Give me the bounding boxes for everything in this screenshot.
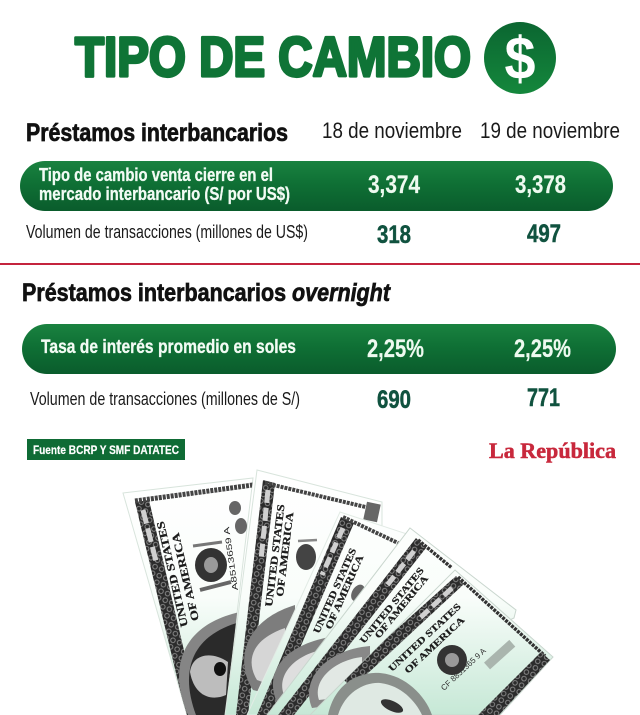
text: volumen dólares: Volumen de transacciones (millones de US$)	[26, 222, 308, 242]
panel: tipo de cambio row: Tipo de cambio venta cierre en el	[39, 164, 273, 185]
source tag: Fuente BCRP Y SMF DATATEC	[33, 445, 179, 457]
bill 3: UNITED STATES	[312, 546, 359, 635]
icon: dollar coin	[484, 22, 556, 94]
value: 690: 690	[377, 386, 411, 414]
value: 497: 497	[527, 220, 561, 248]
panel: tasa de interés row: 2,25%	[514, 335, 571, 363]
bill 3: OF AMERICA	[324, 553, 367, 631]
logo: La República: La República	[489, 438, 616, 463]
bill 5: OF AMERICA	[403, 616, 467, 676]
bill 1: A8513659 A	[222, 525, 240, 591]
panel: tipo de cambio row: 3,378	[515, 171, 566, 199]
panel: tasa de interés row: 2,25%	[367, 335, 424, 363]
heading: préstamos interbancarios: Préstamos interbancarios	[26, 119, 288, 147]
panel: tasa de interés row: Tasa de interés promedio en soles	[41, 337, 296, 358]
bill 4	[267, 528, 516, 715]
panel: tipo de cambio row: 3,374	[368, 171, 420, 199]
bill 4: UNITED STATES	[359, 566, 427, 646]
bill 2: UNITED STATES	[264, 504, 288, 607]
bill 5: UNITED STATES	[387, 602, 464, 674]
bill 1	[123, 478, 253, 715]
text: volumen soles: Volumen de transacciones (millones de S/)	[30, 389, 300, 409]
panel: tasa de interés row	[22, 324, 616, 374]
column header: 18 de noviembre: 18 de noviembre	[322, 118, 462, 143]
value: 318: 318	[377, 221, 411, 249]
bill 2: OF AMERICA	[275, 511, 296, 597]
panel: tipo de cambio row: mercado interbancario (S/ por US$)	[39, 183, 290, 204]
title: TIPO DE CAMBIO	[75, 25, 471, 88]
bill 3	[247, 512, 410, 715]
bill 2	[225, 470, 382, 715]
bill 5: CF 8851365 9 A	[439, 646, 488, 692]
source tag	[27, 439, 185, 460]
icon: dollar coin: $	[504, 25, 536, 92]
bill 4: OF AMERICA	[374, 574, 431, 641]
bill 1: OF AMERICA	[170, 532, 202, 622]
bill 1: UNITED STATES	[155, 520, 191, 628]
illustration: fan of dollar bills	[123, 470, 553, 715]
bill 5	[310, 570, 553, 715]
panel: tipo de cambio row	[20, 161, 613, 211]
value: 771: 771	[527, 384, 560, 412]
heading: préstamos overnight: Préstamos interbancarios overnight	[22, 279, 391, 307]
